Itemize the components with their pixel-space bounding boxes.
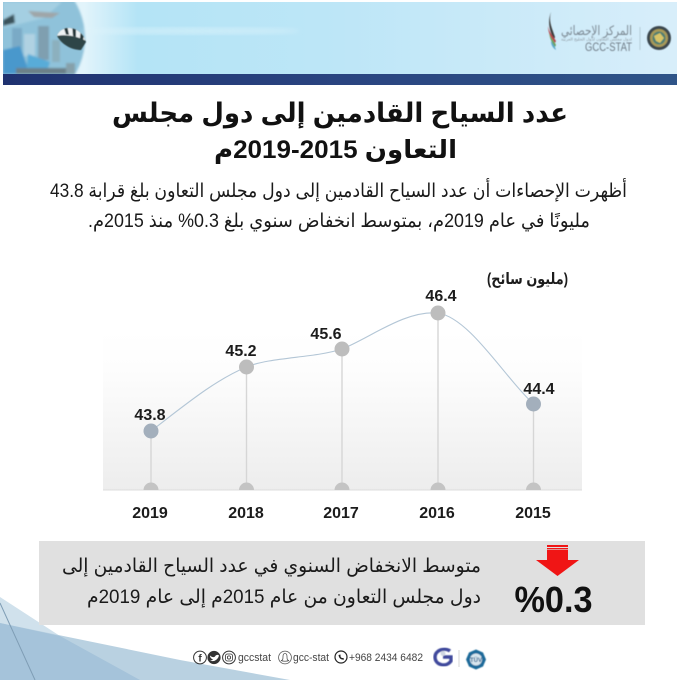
chart background [103,330,582,490]
icon: red down arrow [536,545,579,576]
title: عدد السياح القادمين إلى دول مجلس [112,98,568,129]
data markers [144,306,541,438]
data labels: 43.8 [134,407,166,424]
footer contact bar [194,649,486,670]
drop lines [151,313,534,490]
globe collage [3,2,86,74]
header banner [3,2,677,85]
icon: instagram [223,651,235,664]
icon: twitter [207,651,221,664]
panel background [39,541,645,625]
baseline [103,489,582,491]
icon: facebook [194,651,206,664]
header sky background [3,2,677,74]
data labels: 46.4 [425,288,457,305]
base markers [144,482,541,490]
title: التعاون 2015‏-‏2019م [214,136,457,165]
intro paragraph: مليونًا في عام 2019م، بمتوسط انخفاض سنوي بلغ 0.3% منذ 2015م. [88,211,590,232]
intro paragraph: أظهرت الإحصاءات أن عدد السياح القادمين إلى دول مجلس التعاون بلغ قرابة 43.8 [50,178,627,203]
logo English name: GCC-STAT [585,42,632,54]
panel description: دول مجلس التعاون من عام 2015م إلى عام 2019م [87,587,481,609]
year labels: 2019 [132,505,168,522]
panel description [62,556,481,609]
unit label: (مليون سائح) [487,271,568,288]
summary panel [39,541,645,625]
title [112,98,568,165]
year labels: 2016 [419,505,455,522]
parachute [56,27,87,51]
data labels: 44.4 [523,381,555,398]
navy header bar [3,74,677,85]
handle: gccstat: gccstat [238,652,271,664]
icon: whatsapp [335,651,347,663]
handle: gcc-stat: gcc-stat [293,652,329,664]
icon: facebook: f [198,654,202,664]
year labels: 2018 [228,505,264,522]
intro paragraph [50,178,627,232]
icon: TUV badge [466,650,486,670]
data labels [134,288,555,424]
decline figure: %0.3 [514,579,592,620]
data labels: 45.6 [310,326,342,343]
icon: G certification logo [435,649,451,665]
trend line [151,313,534,431]
icon: snapchat [279,651,291,664]
line chart [103,271,582,522]
logo subtitle: لدول مجلس التعاون لدول الخليج العربية [561,36,632,42]
logo Arabic name: المركز الإحصائي [561,23,632,39]
decorative corner shapes [0,597,290,680]
year labels: 2017 [323,505,359,522]
panel description: متوسط الانخفاض السنوي في عدد السياح القادمين إلى [62,556,481,578]
phone number: +968 2434 6482 [349,652,423,664]
year labels: 2015 [515,505,551,522]
year labels [132,505,551,522]
icon: TUV badge: TÜV [470,657,482,664]
data labels: 45.2 [225,343,257,360]
GCC-STAT logo [548,12,671,54]
logo colour ribbon [548,12,556,50]
GCC emblem [647,26,671,50]
header streak [80,28,300,34]
